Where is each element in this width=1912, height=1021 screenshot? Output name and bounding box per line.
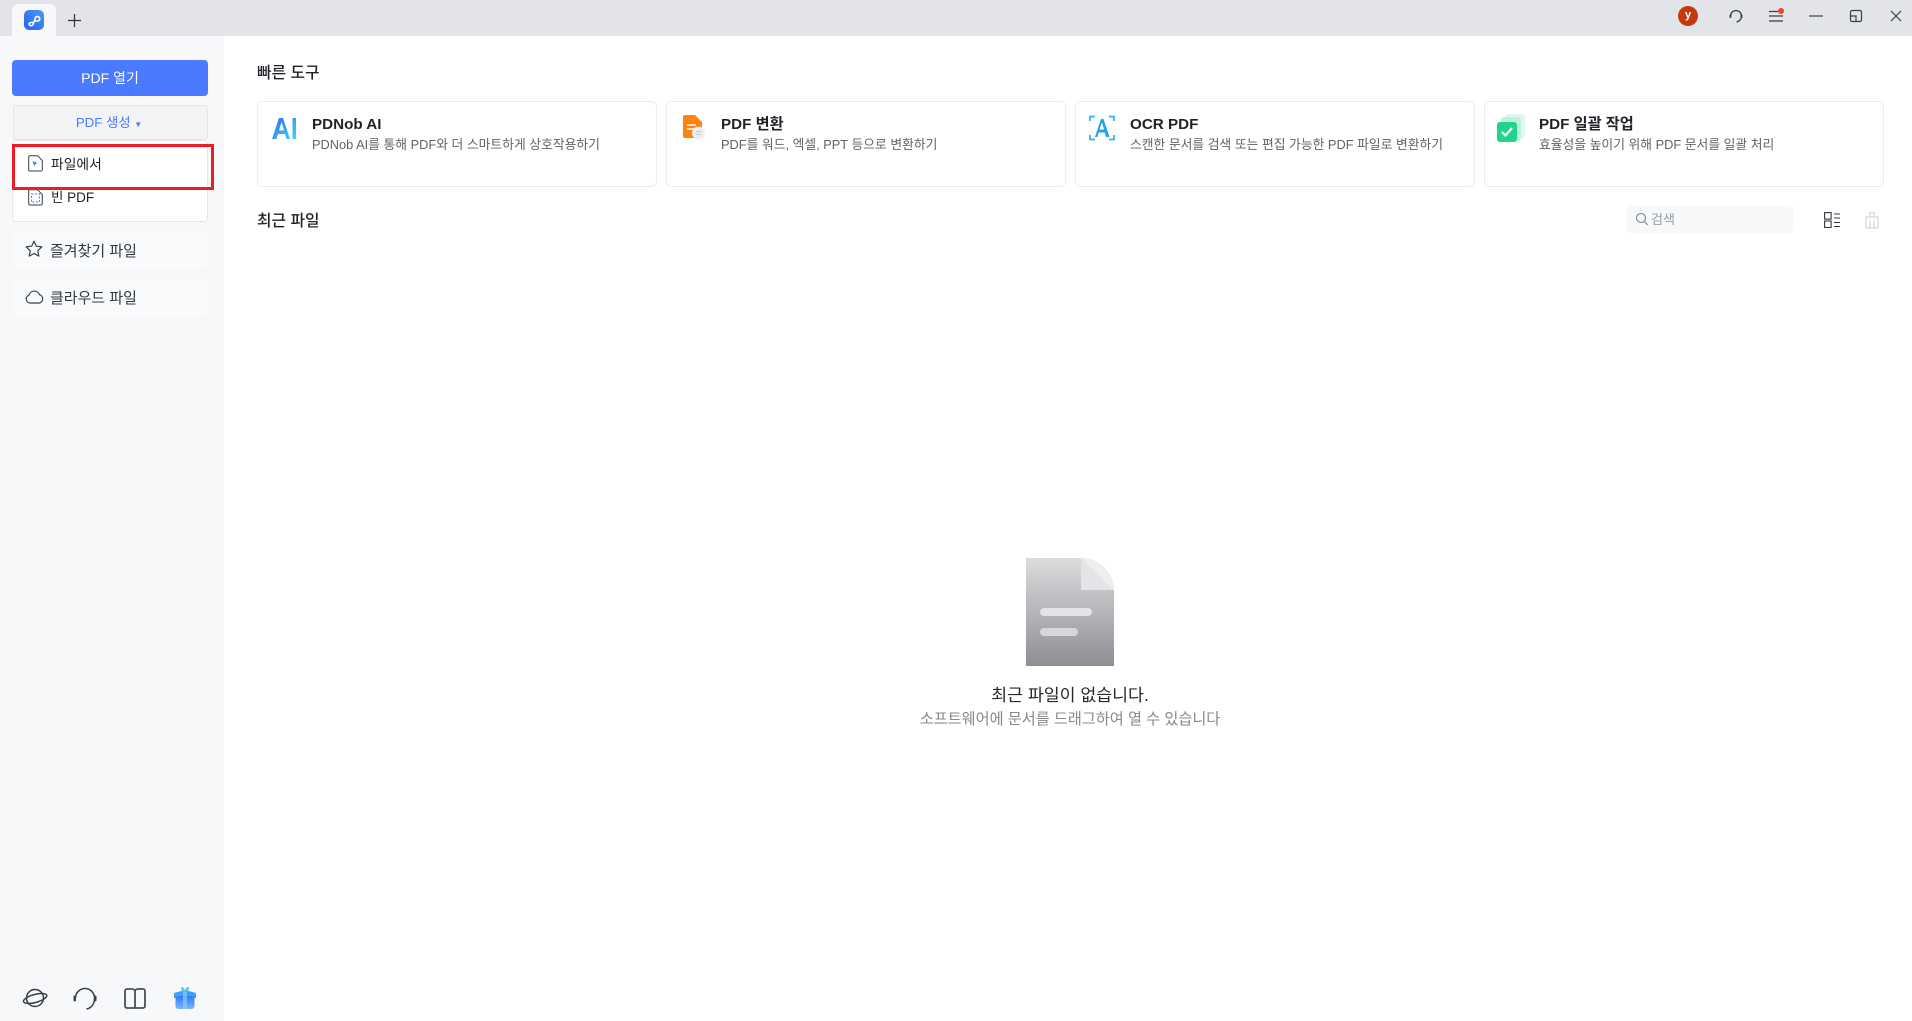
menu item: favorites [13,230,208,268]
search box [1627,206,1793,233]
highlight: red box [12,144,214,190]
title bar [0,0,1912,36]
empty state subtitle: 소프트웨어에 문서를 드래그하여 열 수 있습니다 [920,711,1220,728]
label: blank PDF: 빈 PDF [51,190,94,205]
search placeholder: 검색 [1651,212,1675,227]
heading: recent files: 최근 파일 [257,213,320,230]
icon: blank file [28,190,43,206]
sidebar panel [0,36,224,1021]
icon: AI [272,118,296,139]
icon: file with cursor [28,155,43,172]
icon: restore window [1850,10,1862,22]
card description: PDNob AI를 통해 PDF와 더 스마트하게 상호작용하기 [312,136,600,152]
button: open PDF [12,60,208,96]
icon: headset [74,988,96,1010]
icon: planet [22,988,48,1008]
icon: new tab plus [68,14,81,27]
icon: empty document [1026,558,1114,666]
label: favorites: 즐겨찾기 파일 [50,243,137,260]
icon: close [1890,10,1902,22]
heading: quick tools: 빠른 도구 [257,65,320,82]
card title: OCR PDF [1130,116,1198,133]
icon: user avatar [1678,6,1698,26]
button: create PDF: PDF 생성 ▼ [76,115,142,130]
icon: star [26,240,42,257]
icon: search [1636,213,1648,226]
icon: book [124,988,146,1009]
icon: gift [174,987,196,1009]
label: from file: 파일에서 [51,157,102,172]
icon: cloud [26,290,44,304]
icon: OCR [1089,116,1115,140]
icon: minimize [1809,15,1823,17]
card: OCR PDF [1075,101,1475,187]
empty state title: 최근 파일이 없습니다. [991,685,1149,705]
label: cloud: 클라우드 파일 [50,290,137,307]
card title: PDNob AI [312,116,381,133]
icon: menu with red badge [1769,8,1784,22]
card title: PDF 변환 [721,116,784,133]
icon: user avatar: y [1685,9,1691,21]
card: PDF batch [1484,101,1884,187]
card: PDF convert [666,101,1066,187]
menu item: blank PDF [28,190,94,206]
menu item: from file [28,155,102,172]
dropdown panel [12,140,208,222]
card title: PDF 일괄 작업 [1539,116,1634,133]
button: open PDF: PDF 열기 [81,70,139,86]
card: PDNob AI [257,101,657,187]
button: create PDF [13,105,208,140]
icon: trash [1865,212,1879,229]
icon: list view [1824,212,1840,228]
icon: convert [683,115,705,140]
card description: PDF를 워드, 엑셀, PPT 등으로 변환하기 [721,136,937,152]
active tab [12,4,56,36]
icon: app logo [24,10,44,30]
card description: 스캔한 문서를 검색 또는 편집 가능한 PDF 파일로 변환하기 [1130,136,1443,152]
icon: batch check [1497,114,1525,142]
menu item: cloud [13,278,208,316]
card description: 효율성을 높이기 위해 PDF 문서를 일괄 처리 [1539,136,1774,152]
icon: sync [1730,10,1742,23]
